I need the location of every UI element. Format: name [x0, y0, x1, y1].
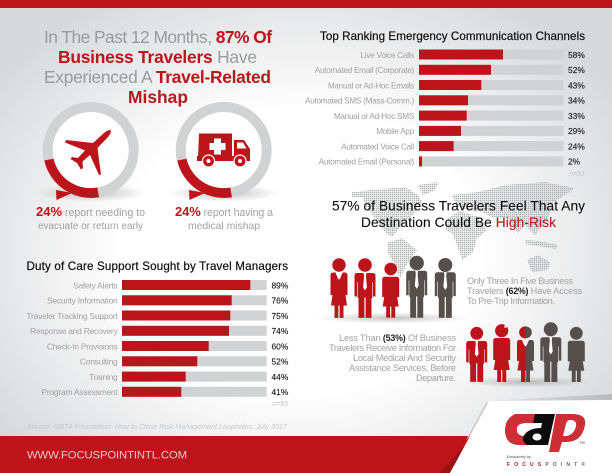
ring with ambulance icon	[168, 107, 280, 202]
caption	[175, 204, 273, 232]
bar chart: emergency channels: 24%	[568, 141, 585, 151]
caption: evacuate or return early	[38, 221, 143, 232]
text: medical and security information: Less Than (53%) Of Business	[339, 333, 456, 343]
bar chart: duty of care: Consulting	[80, 357, 118, 367]
text: medical and security information: Local Medical And Security	[353, 353, 456, 363]
person 5	[568, 327, 585, 382]
icon: ambulance	[197, 134, 250, 167]
person 5	[435, 258, 456, 318]
bar chart: duty of care: Check-In Provisions	[47, 341, 118, 351]
bar chart: duty of care: 41%	[272, 387, 289, 397]
bar chart: duty of care: 60%	[272, 341, 289, 351]
text: pre-trip information: Travelers (62%) Have Access	[467, 286, 582, 296]
logo: cap	[505, 414, 585, 452]
bar chart: emergency channels: Automated Voice Call	[341, 142, 414, 151]
heading: high risk: Destination Could Be High-Risk	[361, 215, 556, 230]
person 3 half filled	[517, 326, 534, 382]
headline: travel mishaps: Experienced A Travel-Related	[44, 67, 271, 87]
bar chart: duty of care: 75%	[272, 311, 289, 321]
bar chart: duty of care: 74%	[272, 326, 289, 336]
panel: medical stat	[168, 107, 280, 232]
person 1	[466, 327, 487, 382]
text: pre-trip information	[467, 276, 582, 306]
headline: travel mishaps: Mishap	[128, 87, 188, 107]
bar chart: emergency channels: Automated Email (Corporate)	[315, 66, 415, 75]
bar chart: duty of care	[26, 280, 289, 408]
bar chart: emergency channels: 34%	[568, 96, 585, 106]
bar chart: emergency channels: Manual or Ad-Hoc SMS	[334, 112, 415, 121]
bar chart: emergency channels: 33%	[568, 111, 585, 121]
bar chart: duty of care: 52%	[272, 357, 289, 367]
bar chart: emergency channels	[305, 50, 585, 178]
headline: travel mishaps	[44, 27, 272, 107]
people group: top row	[314, 256, 470, 324]
top red bar	[0, 0, 612, 8]
bar chart: emergency channels: Live Voice Calls	[361, 51, 414, 60]
bar chart: duty of care: 44%	[272, 372, 289, 382]
heading: high risk: 57% of Business Travelers Feel That Any	[332, 198, 585, 214]
text: pre-trip information: To Pre-Trip Information.	[467, 296, 555, 306]
heading: emergency channels: Top Ranking Emergency Communication Channels	[320, 30, 585, 43]
bar chart: duty of care: Response and Recovery	[30, 326, 119, 336]
person 4	[540, 322, 561, 382]
headline: travel mishaps: In The Past 12 Months, 87% Of	[44, 27, 272, 47]
bar chart: emergency channels: Automated SMS (Mass-Comm.)	[305, 97, 415, 106]
caption: 24% report having a	[175, 204, 273, 219]
person 3	[382, 263, 399, 318]
bar chart: emergency channels: 29%	[568, 126, 585, 136]
world map	[352, 182, 575, 278]
bar chart: duty of care: 76%	[272, 296, 289, 306]
caption	[36, 204, 145, 232]
text: medical and security information	[329, 333, 456, 383]
caption: 24% report needing to	[36, 204, 145, 219]
text: medical and security information: Assistance Services, Before	[349, 363, 456, 373]
bar chart: duty of care: Training	[89, 372, 118, 382]
bar chart: emergency channels: Mobile App	[376, 127, 415, 136]
footer band	[0, 436, 473, 473]
bar chart: emergency channels: 43%	[568, 80, 585, 90]
person 2	[354, 258, 376, 318]
text: pre-trip information: Only Three In Five Business	[467, 276, 573, 286]
bar chart: emergency channels: n=91	[569, 171, 585, 178]
bar chart: duty of care: 89%	[272, 280, 289, 290]
text: medical and security information: Departure.	[416, 373, 456, 383]
bar chart: emergency channels: Manual or Ad-Hoc Emails	[328, 81, 414, 90]
bar chart: duty of care: Safety Alerts	[73, 280, 118, 290]
website url: WWW.FOCUSPOINTINTL.COM	[27, 450, 187, 462]
logo: exclusively by focuspoint	[507, 455, 585, 468]
logo: exclusively by focuspoint: Exclusively by	[507, 455, 532, 459]
bar chart: duty of care: Traveler Tracking Support	[26, 311, 118, 321]
heading: high risk	[332, 198, 585, 230]
caption: medical mishap	[188, 221, 260, 232]
bar chart: emergency channels: 2%	[568, 157, 581, 167]
person 1	[330, 258, 348, 318]
bar chart: duty of care: Program Assessment	[42, 387, 118, 397]
heading: duty of care: Duty of Care Support Sought by Travel Managers	[26, 260, 288, 273]
person 4	[406, 256, 427, 318]
headline: travel mishaps: Business Travelers Have	[58, 47, 257, 67]
ring with airplane icon	[35, 107, 147, 202]
bar chart: duty of care: n=85	[272, 401, 288, 408]
logo: exclusively by focuspoint: FOCUS POINT®	[507, 461, 585, 468]
person 2	[493, 324, 510, 382]
logo: cap: TM	[579, 440, 585, 445]
bar chart: duty of care: Security Information	[47, 296, 118, 306]
grey wedge	[488, 394, 612, 401]
bar chart: emergency channels: Automated Email (Personal)	[319, 158, 415, 167]
text: medical and security information: Travelers Receive Information For	[329, 343, 456, 353]
logo panel	[450, 400, 612, 473]
icon: airplane	[65, 130, 111, 175]
source note: Source: GBTA Foundation: How to Close Risk Management Loopholes, July 2017	[27, 422, 288, 431]
people group: bottom row	[461, 322, 593, 388]
bar chart: emergency channels: 52%	[568, 65, 585, 75]
bar chart: emergency channels: 58%	[568, 50, 585, 60]
panel: evacuate stat	[35, 107, 147, 232]
